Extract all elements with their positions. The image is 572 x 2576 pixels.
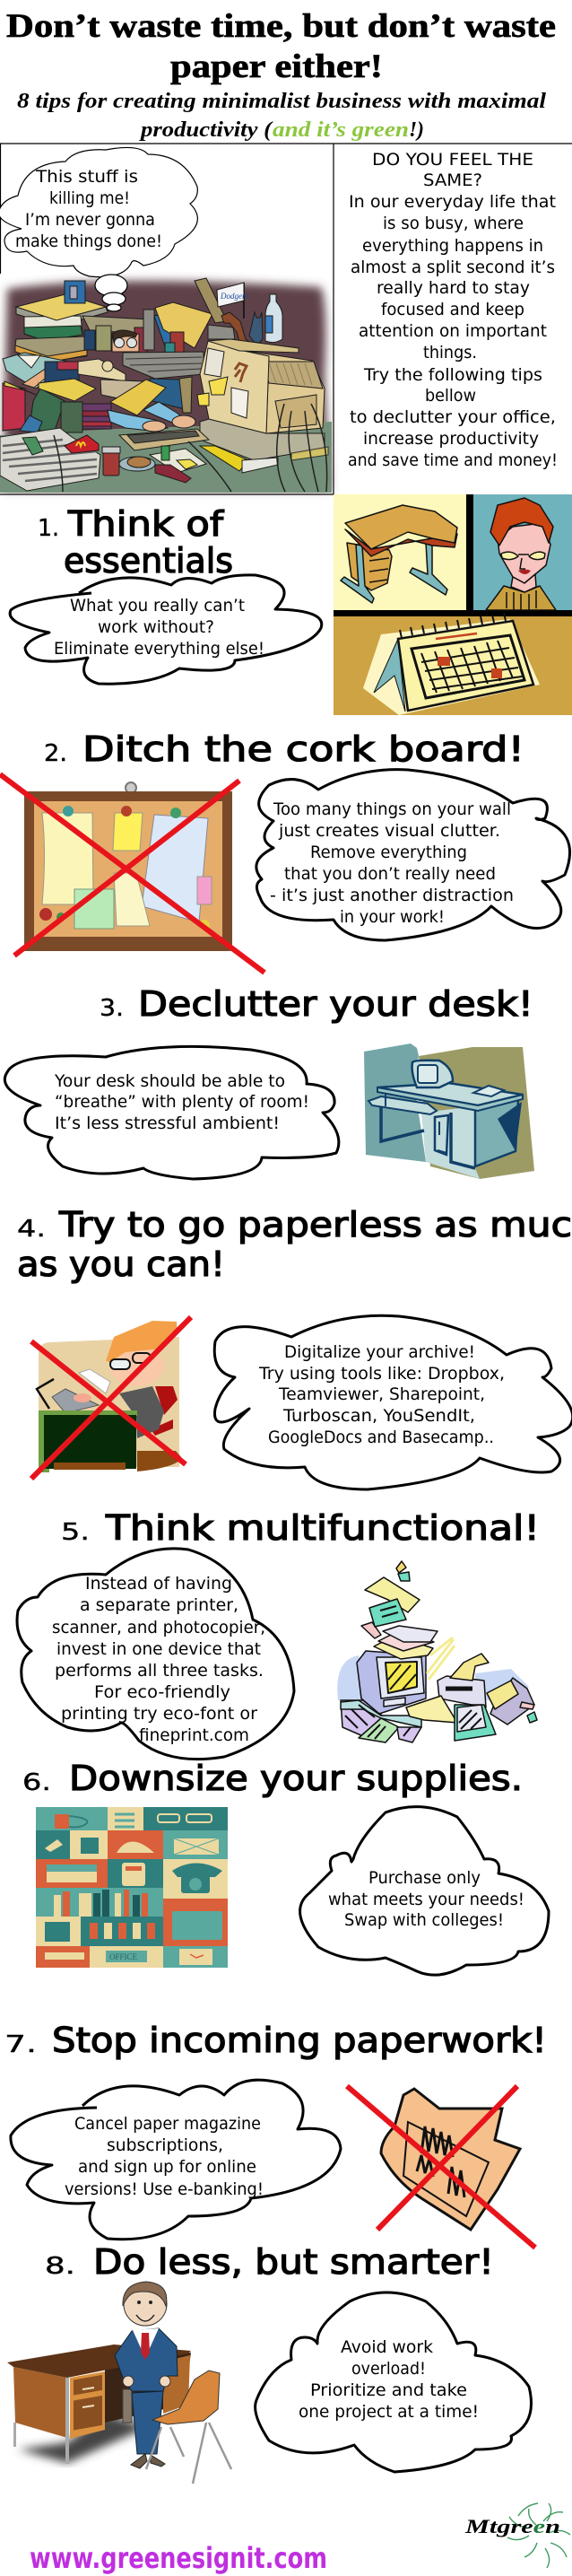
speech cloud: tip 4: Try using tools like: Dropbox, xyxy=(258,1364,505,1384)
speech cloud: tip 4 xyxy=(214,1315,572,1489)
illustration: cluttered desk: Dodgers xyxy=(220,292,248,301)
heading: tip 1 xyxy=(38,504,233,581)
text block: do you feel the same: really hard to stay xyxy=(377,278,530,298)
speech cloud: tip 8 xyxy=(256,2292,531,2472)
speech cloud: tip 5: invest in one device that xyxy=(56,1639,261,1659)
wires and clutter stacked left xyxy=(3,307,111,433)
icon: businessman, desk and chair xyxy=(7,2282,231,2484)
text block: do you feel the same: things. xyxy=(423,343,477,362)
heading: tip 4: Try to go paperless as muc xyxy=(58,1205,572,1244)
heading: tip 1: essentials xyxy=(64,541,233,581)
speech cloud: tip 2: in your work! xyxy=(340,907,445,927)
speech cloud: tip 6: Purchase only xyxy=(368,1868,481,1888)
speech cloud: tip 1 xyxy=(10,575,322,684)
subtitle: !) xyxy=(409,118,424,142)
speech cloud: tip 5: fineprint.com xyxy=(139,1725,249,1745)
heading: tip 1: 1. xyxy=(38,515,59,542)
speech cloud: tip 2: just creates visual clutter. xyxy=(278,821,500,841)
subtitle: and it’s green xyxy=(273,118,409,142)
text block: do you feel the same: DO YOU FEEL THE xyxy=(372,150,533,170)
speech cloud: tip 8: overload! xyxy=(351,2359,426,2379)
website url: www.greenesignit.com xyxy=(30,2541,327,2575)
text block: do you feel the same xyxy=(348,150,558,470)
text block: do you feel the same: SAME? xyxy=(423,170,482,190)
title xyxy=(6,8,556,85)
speech cloud: tip 7: subscriptions, xyxy=(107,2135,223,2155)
subtitle: productivity ( xyxy=(139,118,273,142)
title: Don’t waste time, but don’t waste xyxy=(6,8,556,45)
heading: tip 8: Do less, but smarter! xyxy=(93,2242,494,2282)
heading: tip 6: 6. xyxy=(22,1769,51,1796)
icon: office supplies tile grid: OFFICE xyxy=(109,1952,138,1961)
speech cloud: tip 5: Instead of having xyxy=(85,1574,232,1594)
speech cloud: tip 8: one project at a time! xyxy=(299,2402,479,2422)
icon: crossed-out newspaper xyxy=(347,2086,535,2248)
logo: Mtgreen swirl xyxy=(464,2503,570,2568)
icon: office supplies tile grid xyxy=(36,1807,228,1968)
text block: do you feel the same: and save time and money! xyxy=(348,450,558,470)
text block: do you feel the same: increase productivity xyxy=(363,429,539,449)
text block: do you feel the same: everything happens in xyxy=(362,236,543,256)
speech cloud: tip 8: Avoid work xyxy=(341,2337,433,2357)
speech cloud: tip 5: For eco-friendly xyxy=(94,1682,230,1702)
heading: tip 4 xyxy=(17,1205,572,1284)
heading: tip 5: 5. xyxy=(61,1519,90,1546)
speech cloud: tip 3: It’s less stressful ambient! xyxy=(55,1113,280,1133)
speech cloud: tip 7 xyxy=(11,2080,341,2240)
heading: tip 8: 8. xyxy=(45,2253,75,2280)
subtitle: 8 tips for creating minimalist business with maximal xyxy=(17,90,546,113)
speech cloud: tip 4: Teamviewer, Sharepoint, xyxy=(278,1384,485,1404)
heading: tip 5: Think multifunctional! xyxy=(105,1508,540,1548)
intro panel frame xyxy=(0,144,572,494)
speech cloud: tip 2: - it’s just another distraction xyxy=(270,886,514,905)
speech cloud: tip 5: performs all three tasks. xyxy=(55,1661,264,1681)
thought bubble: this stuff is killing me: make things done! xyxy=(15,231,162,251)
logo: Mtgreen swirl: Mtgre en xyxy=(464,2515,560,2537)
speech cloud: tip 5: scanner, and photocopier, xyxy=(52,1618,265,1637)
title: paper either! xyxy=(170,48,383,85)
heading: tip 2: Ditch the cork board! xyxy=(82,729,524,769)
text block: do you feel the same: bellow xyxy=(425,386,476,406)
icon: office desk with computer xyxy=(364,1043,534,1179)
text block: do you feel the same: attention on important xyxy=(359,321,547,341)
speech cloud: tip 7: versions! Use e-banking! xyxy=(65,2179,264,2199)
thought bubble: this stuff is killing me: killing me! xyxy=(49,188,130,208)
speech cloud: tip 3 xyxy=(4,1046,339,1179)
illustration: cluttered desk xyxy=(0,278,332,493)
text block: do you feel the same: to declutter your office, xyxy=(350,407,556,427)
heading: tip 7: 7. xyxy=(4,2031,37,2058)
thought bubble: this stuff is killing me: This stuff is xyxy=(35,167,138,187)
speech cloud: tip 4: GoogleDocs and Basecamp.. xyxy=(268,1428,494,1447)
icon: crossed-out cork board xyxy=(0,774,264,973)
speech cloud: tip 5 xyxy=(17,1549,294,1760)
speech cloud: tip 2: Remove everything xyxy=(310,843,467,862)
speech cloud: tip 1: Eliminate everything else! xyxy=(54,639,264,659)
speech cloud: tip 4: Turboscan, YouSendIt, xyxy=(282,1406,475,1426)
icon: crossed-out woman at desk xyxy=(31,1317,191,1479)
speech cloud: tip 1: work without? xyxy=(98,617,214,637)
text block: do you feel the same: focused and keep xyxy=(381,300,524,319)
thought bubble: this stuff is killing me xyxy=(0,147,197,311)
speech cloud: tip 7: and sign up for online xyxy=(78,2157,256,2177)
speech cloud: tip 5: a separate printer, xyxy=(80,1595,238,1615)
speech cloud: tip 6: Swap with colleges! xyxy=(344,1910,504,1930)
thought bubble: this stuff is killing me: I’m never gonna xyxy=(25,210,155,230)
speech cloud: tip 2: that you don’t really need xyxy=(284,864,496,884)
speech cloud: tip 8: Prioritize and take xyxy=(310,2380,467,2400)
heading: tip 7: Stop incoming paperwork! xyxy=(52,2021,547,2060)
illustration: desk, woman and calendar xyxy=(334,494,572,715)
speech cloud: tip 5: printing try eco-font or xyxy=(61,1704,257,1724)
speech cloud: tip 6: what meets your needs! xyxy=(328,1890,524,1909)
heading: tip 4: as you can! xyxy=(17,1244,225,1284)
heading: tip 1: Think of xyxy=(67,504,225,544)
speech cloud: tip 2: Too many things on your wall xyxy=(273,799,511,819)
heading: tip 4: 4. xyxy=(17,1216,46,1243)
text block: do you feel the same: is so busy, where xyxy=(383,214,524,233)
speech cloud: tip 6 xyxy=(300,1807,549,1975)
speech cloud: tip 4: Digitalize your archive! xyxy=(284,1342,475,1362)
heading: tip 6: Downsize your supplies. xyxy=(69,1759,523,1798)
text block: do you feel the same: Try the following tips xyxy=(363,365,542,385)
heading: tip 3: 3. xyxy=(100,995,124,1022)
icon: computer and paper pile xyxy=(337,1561,537,1742)
speech cloud: tip 1: What you really can’t xyxy=(70,596,245,616)
speech cloud: tip 3: Your desk should be able to xyxy=(54,1071,285,1091)
speech cloud: tip 2 xyxy=(256,770,570,940)
heading: tip 2: 2. xyxy=(44,740,67,767)
heading: tip 3: Declutter your desk! xyxy=(138,984,533,1024)
text block: do you feel the same: almost a split second it’s xyxy=(351,258,555,277)
text block: do you feel the same: In our everyday life that xyxy=(349,192,556,212)
subtitle xyxy=(17,90,546,142)
speech cloud: tip 3: “breathe” with plenty of room! xyxy=(55,1092,309,1112)
speech cloud: tip 7: Cancel paper magazine xyxy=(74,2114,261,2134)
